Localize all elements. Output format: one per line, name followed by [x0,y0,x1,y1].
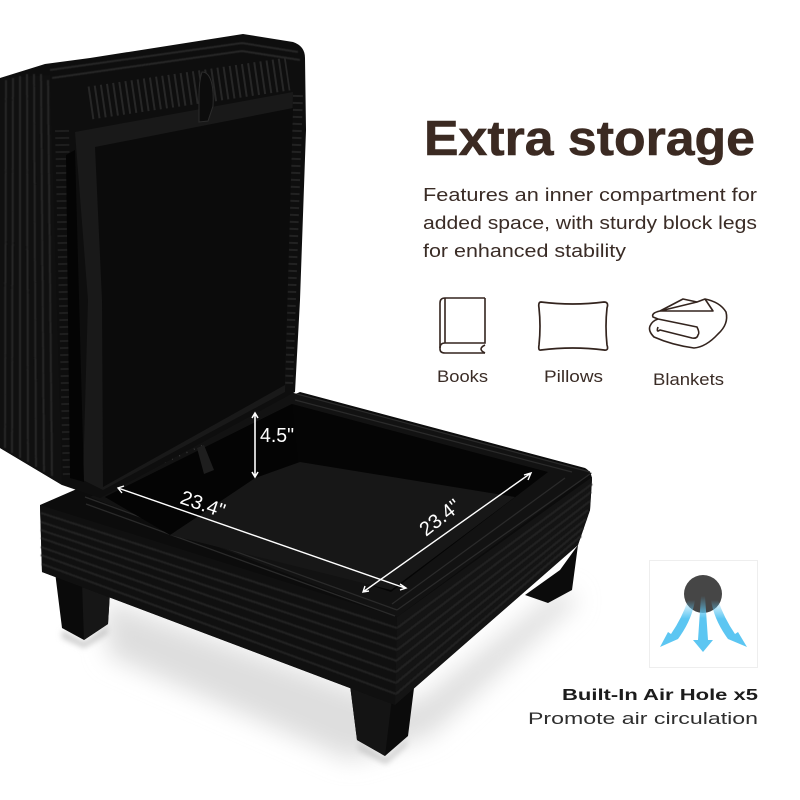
dimension label: height: 4.5" [260,425,294,447]
ottoman product photo [0,34,592,756]
label: books: Books [437,367,488,386]
icon: air hole [684,575,722,613]
label: pillows: Pillows [544,367,603,386]
arrow: depth [252,413,258,477]
description: added space, with sturdy block legs [423,212,757,233]
description: for enhanced stability [423,240,627,261]
dimension arrows [118,413,531,592]
icon: blankets [650,299,727,348]
lid handle [199,72,213,122]
icon: books [440,298,485,353]
air hole subtext: Promote air circulation [528,709,758,728]
label: blankets: Blankets [653,370,724,389]
icon: pillows [539,302,608,350]
legs [55,545,578,756]
floor shadow [62,590,578,764]
description [423,184,757,261]
arrow: length [363,473,531,592]
storage interior [105,404,548,592]
title: Extra storage [424,112,755,166]
open lid [0,34,306,498]
lid rim ribs [90,74,288,103]
base box [40,392,592,705]
dimension label: width: 23.4" [177,487,228,523]
panel: air hole diagram [650,560,758,668]
description: Features an inner compartment for [423,184,757,205]
dimension label: length: 23.4" [416,495,465,541]
lid side ribs [62,130,70,480]
arrow: width [118,486,406,590]
icon: airflow arrows [660,596,747,652]
air hole heading: Built-In Air Hole x5 [562,687,758,704]
